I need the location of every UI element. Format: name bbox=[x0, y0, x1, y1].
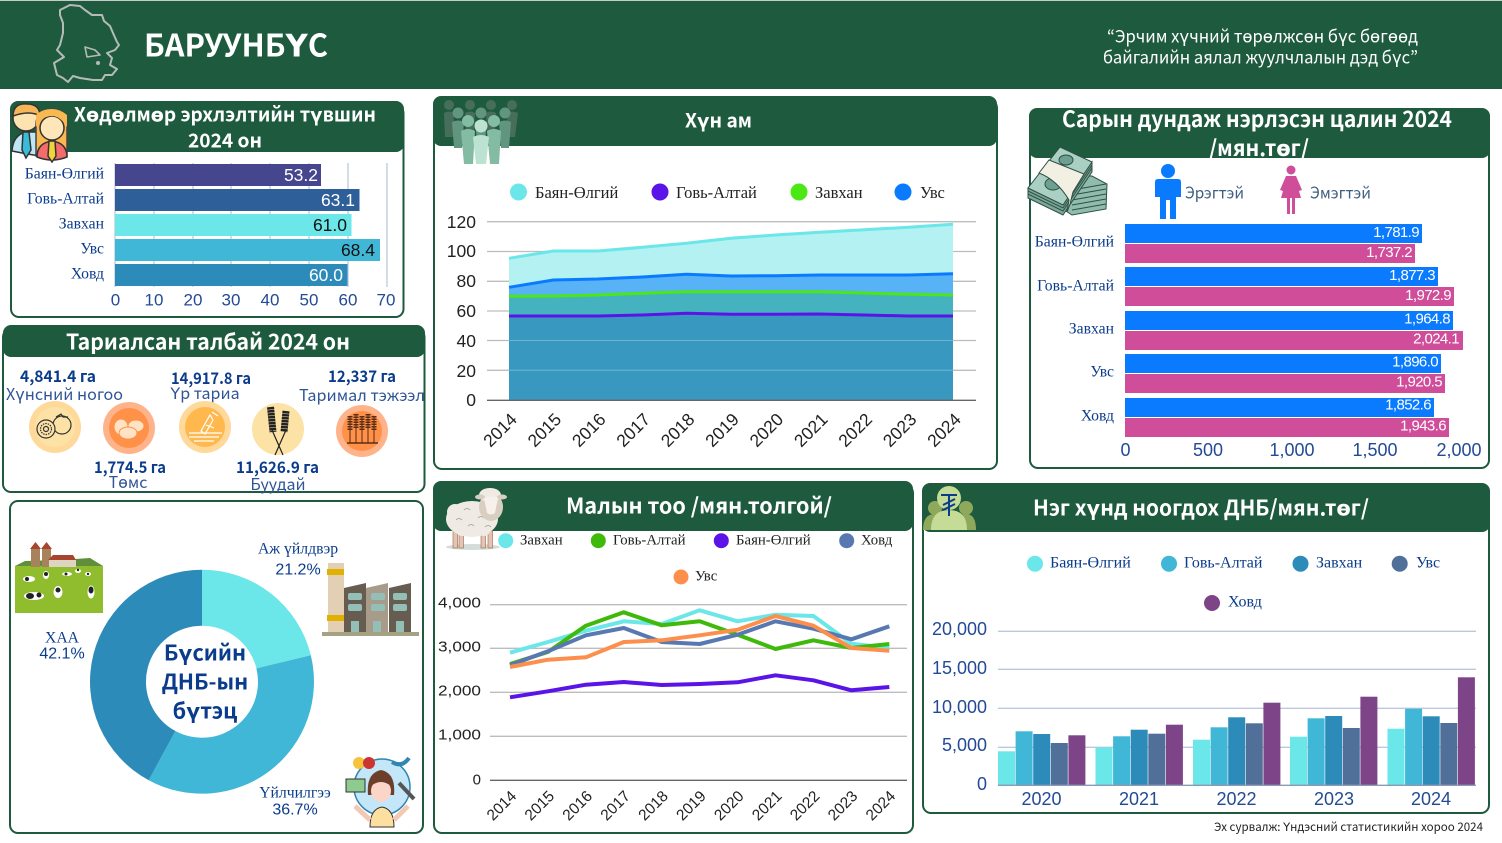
bar chart: GDP per capita: 5,000 bbox=[942, 735, 987, 755]
line chart: livestock: 0 bbox=[473, 772, 481, 788]
icon: service worker bbox=[346, 757, 414, 827]
line chart: livestock: 2022 bbox=[787, 788, 823, 824]
header banner bbox=[0, 0, 1502, 89]
bar chart: employment rate: 50 bbox=[300, 290, 318, 310]
bar chart: employment rate: Баян-Өлгий bbox=[25, 166, 105, 182]
line chart: livestock: 2024 bbox=[863, 788, 899, 824]
bar chart: employment rate: 0 bbox=[111, 290, 120, 310]
line chart: livestock: 2019 bbox=[673, 788, 710, 824]
area chart: population: 2015 bbox=[524, 409, 565, 451]
heading: population: Хүн ам bbox=[685, 104, 752, 134]
heading: wage: /мян.төг/ bbox=[1209, 131, 1309, 163]
area chart: population: 2018 bbox=[657, 409, 698, 451]
area chart: population: 2020 bbox=[746, 409, 787, 451]
icon: people with currency bbox=[923, 486, 976, 530]
bar chart: employment rate: 60.0 bbox=[309, 265, 343, 285]
label: agriculture bbox=[39, 630, 85, 662]
bar chart: wage by gender: 1,896.0 bbox=[1392, 354, 1438, 370]
heading: employment rate bbox=[74, 98, 376, 154]
area chart: population: 100 bbox=[447, 241, 476, 261]
title: БАРУУНБҮС bbox=[144, 20, 328, 66]
bar chart: wage by gender: 1,500 bbox=[1352, 440, 1398, 460]
crop: vegetables: Хүнсний ногоо bbox=[6, 381, 123, 405]
bar chart: employment rate: Увс bbox=[80, 240, 104, 258]
bar chart: wage by gender: 1,920.5 bbox=[1396, 374, 1442, 390]
bar chart: wage by gender: 500 bbox=[1193, 440, 1223, 460]
legend: male bbox=[1155, 164, 1244, 219]
label: industry bbox=[258, 540, 338, 578]
line chart: livestock: 2,000 bbox=[438, 682, 481, 700]
line chart: livestock: 4,000 bbox=[438, 594, 481, 612]
area chart: population: 2024 bbox=[923, 409, 965, 451]
bar chart: employment rate: 10 bbox=[145, 290, 163, 310]
label: services: Үйлчилгээ bbox=[259, 784, 331, 802]
legend: GDP per capita: Ховд bbox=[1228, 594, 1262, 610]
bar chart: GDP per capita: 2021 bbox=[1119, 789, 1159, 809]
panel: sown area bbox=[3, 325, 425, 495]
crop: vegetables bbox=[6, 363, 123, 453]
bar chart: wage by gender: 1,852.6 bbox=[1385, 396, 1431, 414]
label: industry: 21.2% bbox=[275, 562, 321, 578]
slogan: “Эрчим хүчний төрөлжсөн бүс бөгөөд bbox=[1107, 22, 1418, 48]
line chart: livestock: 2017 bbox=[597, 788, 634, 824]
panel: average monthly wage bbox=[1028, 102, 1490, 468]
bar chart: employment rate: 20 bbox=[184, 290, 202, 310]
line chart: livestock: 2015 bbox=[522, 788, 558, 824]
bar chart: GDP per capita: 2024 bbox=[1411, 789, 1451, 809]
bar chart: GDP per capita: 2023 bbox=[1314, 789, 1354, 809]
panel: population bbox=[433, 96, 997, 469]
icon: sheep bbox=[446, 488, 507, 550]
bar chart: employment rate: 60 bbox=[339, 290, 357, 310]
bar chart: GDP per capita: 10,000 bbox=[932, 697, 987, 717]
line chart: livestock: 2021 bbox=[749, 788, 786, 824]
crop: wheat: 11,626.9 га bbox=[236, 454, 319, 478]
line chart: livestock: 2018 bbox=[635, 788, 672, 824]
crop: wheat: Буудай bbox=[250, 471, 306, 495]
line chart: livestock: 1,000 bbox=[438, 726, 481, 744]
area chart: population: 2016 bbox=[568, 409, 610, 451]
icon: factory bbox=[322, 563, 419, 636]
line chart: livestock: 2016 bbox=[560, 788, 596, 824]
label: industry: Аж үйлдвэр bbox=[258, 540, 338, 558]
bar chart: wage by gender: 1,781.9 bbox=[1373, 224, 1419, 241]
bar chart: wage by gender: 1,964.8 bbox=[1404, 310, 1450, 328]
panel: livestock bbox=[433, 481, 913, 833]
label: agriculture: ХАА bbox=[45, 630, 80, 646]
donut centre label: ДНБ-ын bbox=[162, 666, 248, 696]
panel: GDP per capita bbox=[922, 483, 1490, 813]
line chart: livestock: 2014 bbox=[484, 788, 520, 824]
legend: GDP per capita: Баян-Өлгий bbox=[1050, 554, 1131, 572]
legend: male: Эрэгтэй bbox=[1185, 180, 1244, 204]
area chart: population: 60 bbox=[457, 301, 476, 321]
bar chart: wage by gender: 1,943.6 bbox=[1400, 418, 1446, 434]
area chart: population: 2019 bbox=[701, 409, 743, 451]
area chart: population: 0 bbox=[466, 390, 476, 410]
legend: livestock bbox=[498, 532, 893, 584]
bar chart: wage by gender: Завхан bbox=[1069, 320, 1115, 338]
legend: population: Увс bbox=[920, 183, 945, 202]
bar chart: wage by gender: 2,000 bbox=[1436, 440, 1482, 460]
bar chart: wage by gender: 1,000 bbox=[1269, 440, 1315, 460]
label: services bbox=[259, 784, 331, 818]
area chart: population: 2014 bbox=[479, 409, 521, 451]
area chart: population: 80 bbox=[457, 271, 476, 291]
legend: population: Завхан bbox=[815, 183, 863, 202]
bar chart: wage by gender: 0 bbox=[1120, 440, 1131, 460]
bar chart: employment rate: Говь-Алтай bbox=[27, 190, 105, 208]
crop: potato bbox=[94, 402, 166, 493]
heading: livestock: Малын тоо /мян.толгой/ bbox=[566, 490, 832, 520]
legend: population bbox=[510, 183, 945, 202]
line chart: livestock: 3,000 bbox=[438, 638, 481, 656]
source note: Эх сурвалж: Үндэсний статистикийн хороо 2024 bbox=[1214, 819, 1484, 835]
bar chart: wage by gender: 1,877.3 bbox=[1389, 267, 1435, 284]
bar chart: wage by gender: 1,972.9 bbox=[1405, 287, 1451, 304]
bar chart: wage by gender: Увс bbox=[1090, 364, 1114, 380]
crop: grain: Үр тариа bbox=[169, 380, 240, 404]
bar chart: employment rate: 61.0 bbox=[313, 215, 347, 235]
crop: fodder: Таримал тэжээл bbox=[299, 382, 425, 406]
bar chart: wage by gender: Говь-Алтай bbox=[1037, 278, 1115, 294]
area chart: population: 2023 bbox=[879, 409, 920, 451]
bar chart: employment rate: 30 bbox=[222, 290, 240, 310]
bar chart: GDP per capita: 15,000 bbox=[932, 658, 987, 678]
legend: livestock: Увс bbox=[695, 568, 718, 584]
panel: GDP structure donut bbox=[10, 501, 423, 833]
area chart: population: 120 bbox=[447, 212, 476, 232]
bar chart: employment rate: 70 bbox=[377, 290, 395, 310]
crop: potato: 1,774.5 га bbox=[94, 454, 166, 478]
icon: farm bbox=[15, 542, 103, 613]
bar chart: GDP per capita: 20,000 bbox=[932, 619, 987, 639]
heading: wage: Сарын дундаж нэрлэсэн цалин 2024 bbox=[1062, 102, 1452, 134]
slogan bbox=[1103, 22, 1418, 68]
panel: employment rate bbox=[10, 98, 404, 317]
crop: grain bbox=[169, 365, 251, 453]
crop: wheat bbox=[236, 403, 319, 495]
area chart: population: 2021 bbox=[790, 409, 832, 451]
legend: GDP per capita: Увс bbox=[1416, 554, 1440, 572]
line chart: livestock bbox=[438, 594, 907, 824]
bar chart: wage by gender: Баян-Өлгий bbox=[1035, 234, 1115, 250]
crop: grain: 14,917.8 га bbox=[171, 365, 251, 389]
line chart: livestock: 2020 bbox=[711, 788, 748, 824]
bar chart: GDP per capita bbox=[932, 619, 1476, 809]
crop: fodder bbox=[299, 363, 425, 457]
bar chart: GDP per capita: 0 bbox=[977, 774, 987, 794]
bar chart: wage by gender: 1,737.2 bbox=[1366, 244, 1412, 261]
bar chart: GDP per capita: 2022 bbox=[1216, 789, 1257, 809]
legend: population: Баян-Өлгий bbox=[535, 183, 618, 202]
heading: employment rate: Хөдөлмөр эрхлэлтийн түвшин bbox=[74, 98, 376, 128]
legend: female bbox=[1280, 166, 1371, 214]
bar chart: employment rate: 63.1 bbox=[321, 190, 355, 210]
bar chart: GDP per capita: 2020 bbox=[1021, 789, 1062, 809]
bar chart: wage by gender: Ховд bbox=[1081, 408, 1114, 424]
legend: livestock: Говь-Алтай bbox=[613, 532, 686, 548]
area chart: population: 2017 bbox=[612, 409, 654, 451]
area chart: population bbox=[447, 212, 976, 451]
bar chart: employment rate: 40 bbox=[261, 290, 279, 310]
label: agriculture: 42.1% bbox=[39, 646, 85, 662]
slogan: байгалийн аялал жуулчлалын дэд бүс” bbox=[1103, 44, 1418, 68]
bar chart: employment rate: 68.4 bbox=[341, 240, 375, 260]
donut centre label bbox=[162, 636, 248, 726]
icon: crowd bbox=[444, 100, 518, 164]
icon: money stacks bbox=[1028, 147, 1107, 215]
bar chart: employment rate: Завхан bbox=[59, 216, 105, 232]
heading: employment rate: 2024 он bbox=[188, 124, 262, 154]
icon: region map outline bbox=[54, 5, 119, 82]
bar chart: employment rate: 53.2 bbox=[284, 165, 318, 185]
legend: GDP per capita bbox=[1027, 554, 1440, 611]
donut centre label: бүтэц bbox=[173, 694, 237, 726]
donut chart: GDP structure bbox=[90, 570, 314, 794]
line chart: livestock: 2023 bbox=[825, 788, 861, 824]
legend: population: Говь-Алтай bbox=[676, 183, 757, 202]
area chart: population: 2022 bbox=[834, 409, 876, 451]
legend: female: Эмэгтэй bbox=[1310, 180, 1371, 204]
label: services: 36.7% bbox=[272, 802, 318, 818]
bar chart: employment rate: Ховд bbox=[71, 266, 104, 282]
bar chart: employment rate bbox=[25, 163, 395, 310]
legend: livestock: Ховд bbox=[861, 532, 893, 548]
heading: wage bbox=[1062, 102, 1452, 163]
legend: GDP per capita: Говь-Алтай bbox=[1184, 554, 1263, 572]
crop: vegetables: 4,841.4 га bbox=[20, 363, 96, 387]
icon: man and woman bbox=[12, 104, 67, 162]
heading: sown area: Тариалсан талбай 2024 он bbox=[66, 326, 350, 356]
bar chart: wage by gender: 2,024.1 bbox=[1413, 330, 1459, 348]
area chart: population: 40 bbox=[457, 331, 476, 351]
heading: GDP per capita: Нэг хүнд ноогдох ДНБ/мян.төг/ bbox=[1033, 492, 1369, 522]
crop: fodder: 12,337 га bbox=[328, 363, 396, 387]
legend: livestock: Завхан bbox=[520, 532, 563, 548]
area chart: population: 20 bbox=[457, 361, 476, 381]
bar chart: wage by gender bbox=[1035, 224, 1482, 460]
crop: potato: Төмс bbox=[109, 469, 147, 493]
legend: livestock: Баян-Өлгий bbox=[736, 532, 811, 548]
legend: GDP per capita: Завхан bbox=[1316, 554, 1363, 572]
donut centre label: Бүсийн bbox=[164, 636, 246, 668]
